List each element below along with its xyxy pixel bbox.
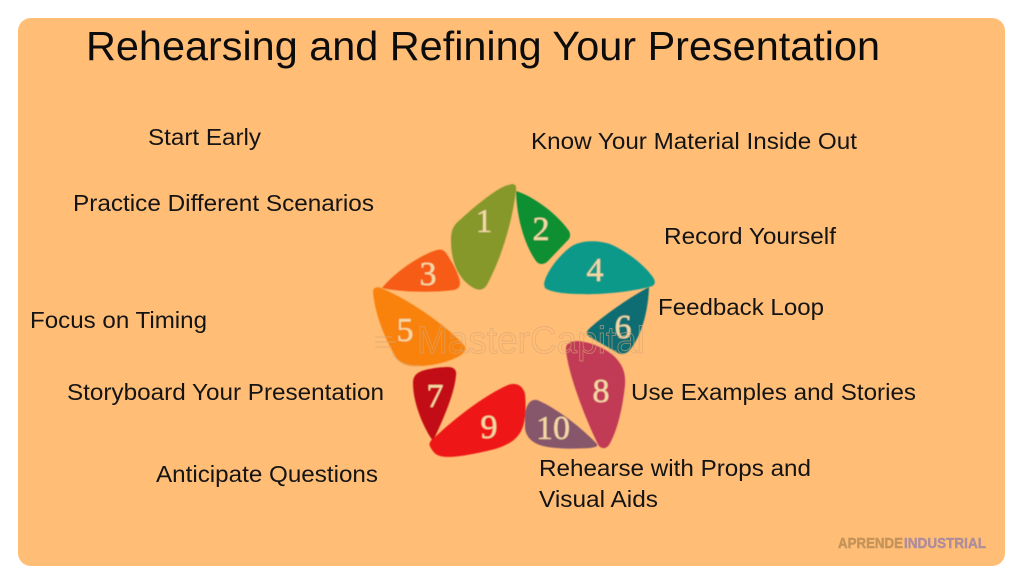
brand logo: Aprende Industrial: INDUSTRIAL	[904, 536, 986, 552]
petal 10	[525, 400, 597, 449]
title: Rehearsing and Refining Your Presentation	[86, 23, 880, 69]
watermark: MasterCapital	[375, 320, 645, 365]
petal 1: 1	[476, 203, 492, 240]
label: Practice Different Scenarios: Practice Different Scenarios	[73, 190, 374, 216]
petal 1	[451, 184, 516, 290]
petal 6	[587, 287, 649, 354]
label: Rehearse with Props and Visual Aids: Rehearse with Props and	[539, 455, 811, 481]
label: Know Your Material Inside Out: Know Your Material Inside Out	[531, 128, 857, 154]
label: Anticipate Questions: Anticipate Questions	[156, 461, 378, 487]
watermark icon	[375, 337, 420, 365]
petal 3: 3	[420, 256, 436, 293]
watermark text: MasterCapital	[417, 320, 645, 362]
label: Use Examples and Stories: Use Examples and Stories	[631, 379, 916, 405]
petal 9: 9	[480, 409, 498, 446]
label: Storyboard Your Presentation: Storyboard Your Presentation	[67, 379, 384, 405]
label: Rehearse with Props and Visual Aids	[539, 455, 811, 512]
label: Rehearse with Props and Visual Aids: Visual Aids	[539, 486, 658, 512]
petal 7	[413, 367, 456, 441]
petal 10: 10	[536, 410, 570, 447]
petal 8: 8	[592, 373, 610, 410]
petal 2: 2	[532, 211, 550, 248]
petal 6: 6	[614, 309, 632, 346]
petal 4	[544, 241, 655, 294]
petal 5	[373, 287, 465, 366]
petal 9	[430, 384, 526, 457]
label: Feedback Loop: Feedback Loop	[658, 294, 824, 320]
brand logo: Aprende Industrial	[838, 536, 986, 552]
petal 5: 5	[396, 312, 414, 349]
label: Start Early: Start Early	[148, 124, 261, 150]
petal 4: 4	[586, 252, 604, 289]
star diagram	[373, 184, 655, 457]
petal 3	[382, 250, 460, 293]
petal 7: 7	[426, 378, 444, 415]
label: Record Yourself: Record Yourself	[664, 223, 836, 249]
petal 8	[566, 341, 625, 448]
petal 2	[516, 191, 570, 264]
label: Focus on Timing: Focus on Timing	[30, 307, 207, 333]
brand logo: Aprende Industrial: APRENDE	[838, 536, 903, 552]
